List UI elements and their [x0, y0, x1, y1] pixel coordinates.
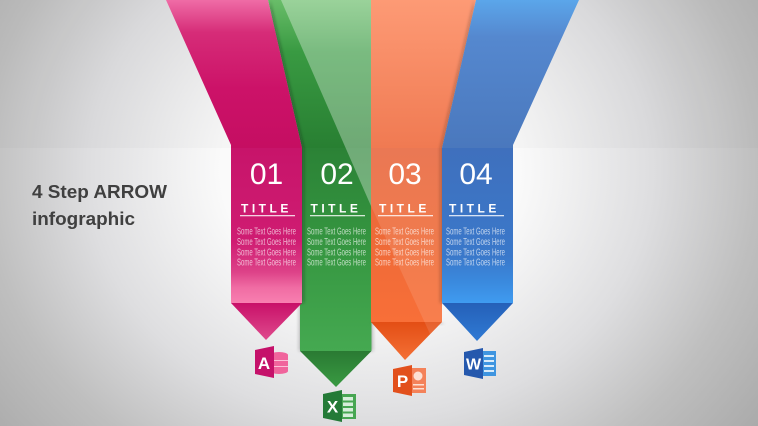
panel: step 04 blue arrow	[440, 0, 579, 341]
icon: Access	[255, 346, 288, 378]
green body	[300, 148, 372, 351]
pink body	[231, 148, 302, 303]
body text 01	[237, 226, 296, 268]
heading	[32, 181, 168, 229]
green light fold	[281, 0, 371, 206]
body text 01: Some Text Goes Here	[237, 248, 296, 258]
icon: Word: W	[466, 356, 482, 374]
blue funnel top	[442, 0, 579, 148]
heading: 4 Step ARROW	[32, 181, 168, 202]
number 02: 02	[320, 158, 354, 191]
body text 02	[307, 226, 366, 268]
title 02: TITLE	[310, 202, 361, 216]
body text 04: Some Text Goes Here	[446, 226, 505, 238]
pink funnel top	[166, 0, 302, 148]
orange light fold	[371, 148, 442, 334]
green arrow head	[300, 351, 372, 387]
body text 04: Some Text Goes Here	[446, 237, 505, 248]
panel: step 02 green arrow	[268, 0, 373, 387]
green funnel top	[268, 0, 371, 148]
body text 02: Some Text Goes Here	[307, 258, 366, 268]
body text 02: Some Text Goes Here	[307, 226, 366, 238]
title 03: TITLE	[379, 202, 430, 216]
orange funnel top	[371, 0, 476, 148]
number 03: 03	[388, 158, 422, 191]
green shadow	[299, 148, 373, 351]
blue shadow	[440, 0, 474, 303]
icon: Excel: X	[327, 398, 339, 416]
number 04: 04	[459, 158, 493, 191]
body text 04: Some Text Goes Here	[446, 258, 505, 268]
panel: step 01 pink arrow	[166, 0, 304, 340]
orange shadow	[372, 322, 443, 325]
icon: PowerPoint	[393, 365, 426, 396]
orange arrow head	[371, 322, 442, 360]
blue arrow head	[442, 303, 513, 341]
body text 03: Some Text Goes Here	[375, 237, 434, 248]
icon: PowerPoint: P	[397, 372, 408, 391]
body text 03	[375, 226, 434, 268]
blue body	[442, 148, 513, 303]
icon: Word	[464, 348, 496, 379]
icon: Excel	[323, 390, 356, 422]
title 04: TITLE	[449, 202, 500, 216]
body text 04: Some Text Goes Here	[446, 248, 505, 258]
body text 01: Some Text Goes Here	[237, 226, 296, 238]
icon: Access: A	[258, 354, 270, 373]
heading: infographic	[32, 208, 135, 229]
body text 02: Some Text Goes Here	[307, 248, 366, 258]
number 01: 01	[250, 158, 283, 191]
body text 01: Some Text Goes Here	[237, 237, 296, 248]
pink shadow	[270, 0, 304, 303]
body text 04	[446, 226, 505, 268]
title 01: TITLE	[241, 202, 292, 216]
panel: step 03 orange arrow	[371, 0, 476, 360]
body text 03: Some Text Goes Here	[375, 258, 434, 268]
body text 02: Some Text Goes Here	[307, 237, 366, 248]
body text 03: Some Text Goes Here	[375, 226, 434, 238]
body text 03: Some Text Goes Here	[375, 248, 434, 258]
orange body	[371, 148, 442, 322]
pink arrow head	[231, 303, 302, 340]
body text 01: Some Text Goes Here	[237, 258, 296, 268]
